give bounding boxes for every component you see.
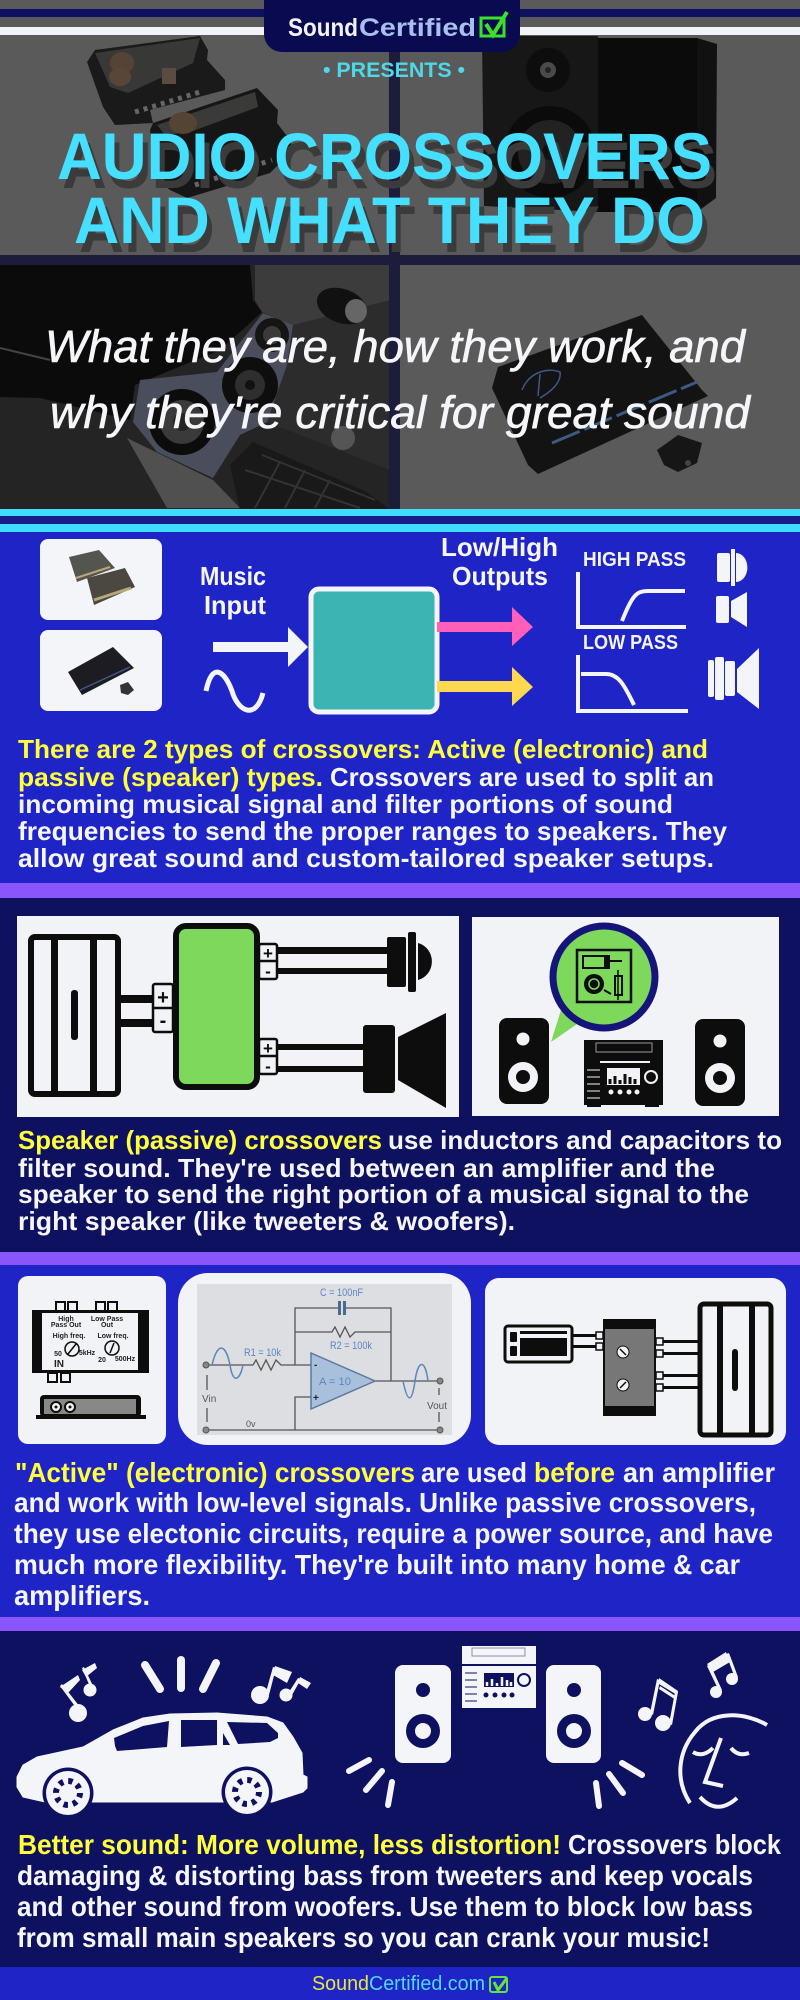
chart: low pass xyxy=(578,632,688,711)
logo tab xyxy=(264,0,520,52)
text block: active crossovers: and work with low-level signals. Unlike passive crossovers, xyxy=(14,1487,756,1518)
signal waves xyxy=(212,1348,428,1398)
unit labels xyxy=(51,1316,136,1370)
icon: eighth note xyxy=(707,1652,738,1698)
icon: beamed note near face xyxy=(638,1678,678,1731)
top stripes xyxy=(0,9,800,35)
icon: woofer xyxy=(708,648,759,709)
card: active crossover photo xyxy=(40,630,162,711)
unit labels: 5kHz xyxy=(79,1350,96,1357)
crossover box xyxy=(311,589,437,712)
wires: crossover to speakers xyxy=(278,947,388,1072)
panel: active crossovers xyxy=(0,1265,800,1617)
hero bottom stripes xyxy=(0,509,800,532)
icon: tweeter xyxy=(387,932,432,992)
icon: music note right xyxy=(251,1666,311,1704)
icon: footer check box xyxy=(490,1977,507,1992)
icon: woofer xyxy=(363,1013,446,1108)
text block: passive crossovers: Speaker (passive) crossovers xyxy=(18,1125,382,1155)
left speaker xyxy=(499,1018,549,1104)
footer xyxy=(0,1967,800,2000)
icon: crossover components xyxy=(577,950,631,1002)
card: active wiring diagram xyxy=(485,1278,786,1445)
icon: music note left xyxy=(60,1663,97,1722)
circuit labels: A = 10 xyxy=(319,1376,351,1388)
title: AND WHAT THEY DO xyxy=(74,183,705,257)
icon: sound rays right xyxy=(596,1763,642,1806)
unit labels: 50 xyxy=(54,1351,62,1358)
circuit labels: 0v xyxy=(246,1419,256,1429)
text block: active crossovers: "Active" (electronic) crossovers xyxy=(15,1457,415,1488)
lower output terminal xyxy=(259,1039,277,1076)
head unit xyxy=(505,1326,572,1362)
photo: active crossover xyxy=(492,315,708,474)
card: passive crossover photo xyxy=(40,539,162,620)
text block: better sound: damaging & distorting bass from tweeters and keep vocals xyxy=(17,1860,753,1891)
text block: passive crossovers: speaker to send the right portion of a musical signal to the xyxy=(18,1179,749,1209)
text block: better sound xyxy=(17,1829,781,1953)
amplifier xyxy=(31,937,118,1094)
text block: crossover types: Crossovers are used to split an xyxy=(330,762,714,792)
input terminal: + xyxy=(157,987,169,1009)
label: low high outputs: Outputs xyxy=(452,561,548,591)
upper output terminal xyxy=(259,944,277,981)
text block: active crossovers: much more flexibility. They're built into many home & car xyxy=(14,1549,740,1580)
circuit wires xyxy=(206,1308,440,1430)
logo text: Certified xyxy=(359,14,476,42)
icon: tweeter xyxy=(717,549,747,586)
stereo receiver xyxy=(584,1040,663,1107)
presents label: • PRESENTS • xyxy=(323,59,465,82)
unit labels: 500Hz xyxy=(115,1356,136,1363)
circuit labels xyxy=(202,1287,447,1429)
amplifier xyxy=(700,1304,771,1435)
card: op-amp circuit xyxy=(178,1273,471,1445)
title: AND WHAT THEY DO xyxy=(79,192,710,266)
window cross dividers xyxy=(0,35,800,532)
text block: active crossovers: amplifiers. xyxy=(14,1580,150,1611)
panel: better sound xyxy=(0,1631,800,1967)
circuit labels: - xyxy=(314,1360,317,1371)
footer url: Certified.com xyxy=(369,1973,485,1995)
text block: better sound: Better sound: More volume, less distortion! xyxy=(18,1829,561,1860)
capacitor xyxy=(338,1301,346,1315)
photo: car door speakers xyxy=(0,265,390,532)
label: music input: Music xyxy=(200,561,266,591)
circuit labels: + xyxy=(313,1393,319,1404)
text block: active crossovers: are used xyxy=(421,1457,527,1488)
icon: check box xyxy=(481,12,507,36)
input terminal xyxy=(153,984,173,1032)
unit labels: IN xyxy=(54,1359,64,1370)
icon: right speaker xyxy=(546,1665,601,1763)
lower output terminal: - xyxy=(265,1057,271,1076)
unit labels: Low freq. xyxy=(97,1333,129,1340)
dials xyxy=(65,1341,119,1356)
title: AUDIO CROSSOVERS xyxy=(62,128,717,202)
circuit labels: Vout xyxy=(427,1401,447,1412)
panel: what crossovers do xyxy=(0,532,800,883)
subtitle: why they're critical for great sound xyxy=(50,387,752,438)
text block: better sound: and other sound from woofers. Use them to block low bass xyxy=(17,1891,753,1922)
text block: crossover types: frequencies to send the proper ranges to speakers. They xyxy=(18,816,728,846)
circuit labels: C = 100nF xyxy=(320,1287,363,1299)
arrow: input xyxy=(213,627,308,667)
divider band xyxy=(0,1252,800,1265)
text block: passive crossovers xyxy=(18,1125,782,1236)
upper output terminal: + xyxy=(263,944,273,963)
text block: active crossovers: an amplifier xyxy=(623,1457,775,1488)
panel: speaker passive crossovers xyxy=(0,898,800,1252)
crossover box xyxy=(176,926,257,1087)
right speaker xyxy=(695,1019,745,1106)
label: low high outputs: Low/High xyxy=(441,532,558,562)
text block: crossover types xyxy=(18,734,728,873)
chart: low pass: LOW PASS xyxy=(583,632,678,654)
card: passive wiring diagram xyxy=(17,916,459,1117)
text block: passive crossovers: use inductors and capacitors to xyxy=(388,1125,782,1155)
label: low high outputs xyxy=(441,532,558,591)
upper output terminal: - xyxy=(265,962,271,981)
text block: crossover types: allow great sound and custom-tailored speaker setups. xyxy=(18,843,714,873)
icon: car xyxy=(17,1713,307,1818)
lower output terminal: + xyxy=(263,1039,273,1058)
circuit labels: Vin xyxy=(202,1394,216,1405)
divider band xyxy=(0,1617,800,1631)
card: home stereo with crossover xyxy=(472,917,779,1116)
arrow: high output xyxy=(437,607,533,646)
text block: active crossovers xyxy=(14,1457,775,1611)
unit labels: 20 xyxy=(98,1357,106,1364)
title: AUDIO CROSSOVERS xyxy=(57,119,712,193)
photo: bookshelf speaker xyxy=(482,36,717,212)
callout bubble xyxy=(551,926,655,1042)
text block: crossover types: There are 2 types of crossovers: Active (electronic) and xyxy=(18,734,708,764)
terminals xyxy=(596,1332,663,1391)
op-amp triangle xyxy=(311,1353,375,1409)
terminals xyxy=(203,1362,443,1433)
rear wheel xyxy=(222,1766,272,1818)
text block: crossover types: passive (speaker) types. xyxy=(18,762,323,792)
footer url xyxy=(312,1973,485,1995)
icon: sound bars above car xyxy=(145,1660,216,1689)
text block: better sound: from small main speakers so you can crank your music! xyxy=(17,1922,710,1953)
chart: high pass xyxy=(578,549,686,627)
unit labels: Out xyxy=(101,1322,114,1329)
title xyxy=(57,119,717,266)
wires xyxy=(572,1334,698,1389)
front wheel xyxy=(42,1768,94,1818)
input terminal: - xyxy=(160,1010,166,1032)
panel: hero header xyxy=(0,0,800,532)
divider band xyxy=(0,883,800,898)
label: music input xyxy=(200,561,266,620)
wires: amp to crossover xyxy=(118,995,152,1027)
subtitle: What they are, how they work, and xyxy=(45,321,747,372)
unit labels: Pass Out xyxy=(51,1322,82,1329)
icon: stereo receiver xyxy=(462,1646,536,1708)
chart: high pass: HIGH PASS xyxy=(583,549,686,571)
crossover module xyxy=(603,1319,656,1416)
card: active crossover unit xyxy=(18,1276,166,1444)
text block: crossover types: incoming musical signal and filter portions of sound xyxy=(18,789,673,819)
circuit labels: R2 = 100k xyxy=(330,1340,372,1352)
side view of unit xyxy=(36,1395,146,1419)
unit labels: High xyxy=(58,1316,74,1323)
icon: sine wave xyxy=(206,672,263,710)
logo text: Sound xyxy=(288,14,358,42)
icon: midrange speaker xyxy=(716,592,747,627)
icon: left speaker xyxy=(395,1665,451,1763)
logo text xyxy=(288,14,476,42)
text block: passive crossovers: filter sound. They're used between an amplifier and the xyxy=(18,1153,715,1183)
arrow: low output xyxy=(437,667,533,706)
footer url: Sound xyxy=(312,1973,369,1995)
unit labels: High freq. xyxy=(53,1333,85,1340)
text block: better sound: Crossovers block xyxy=(568,1829,781,1860)
unit labels: Low Pass xyxy=(91,1316,123,1323)
text block: passive crossovers: right speaker (like tweeters & woofers). xyxy=(18,1206,515,1236)
circuit labels: R1 = 10k xyxy=(244,1347,281,1359)
text block: active crossovers: before xyxy=(534,1457,615,1488)
label: music input: Input xyxy=(204,590,266,620)
photo: passive crossovers xyxy=(87,36,293,198)
icon: sound rays left xyxy=(349,1760,392,1805)
icon: listening face xyxy=(680,1715,767,1807)
subtitle xyxy=(45,321,752,438)
